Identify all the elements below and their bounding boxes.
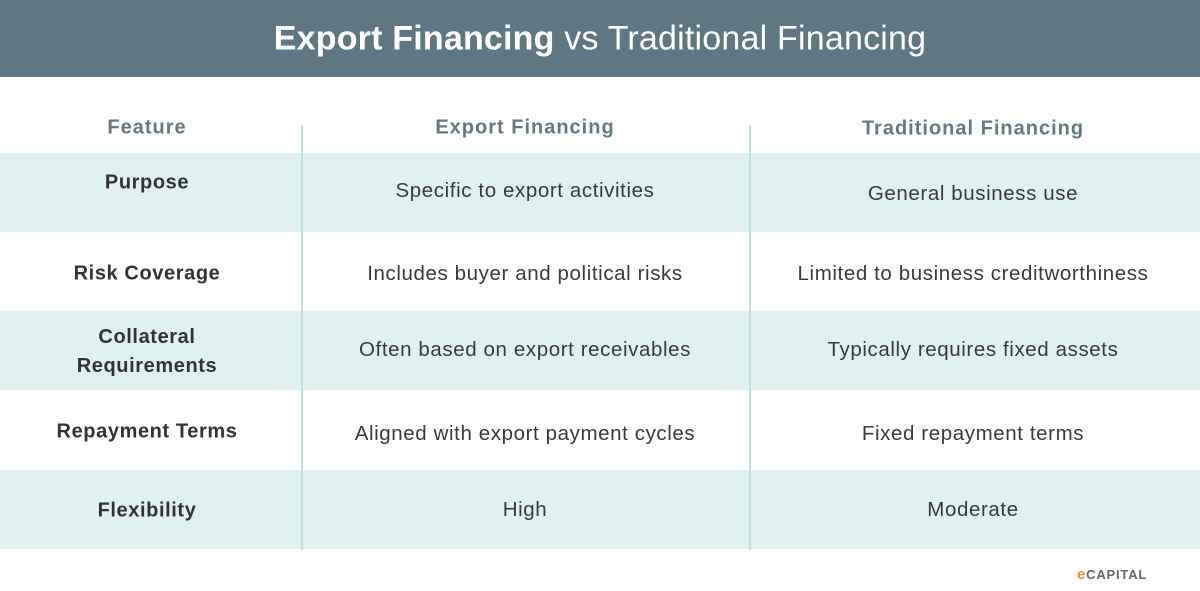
row: collateral: Collateral (98, 326, 196, 348)
row: purpose: General business use (868, 182, 1078, 205)
row backgrounds (0, 153, 1200, 232)
row: risk coverage: Limited to business creditworthiness (798, 262, 1148, 285)
row: collateral: Requirements (77, 355, 217, 377)
row: flexibility (98, 498, 1019, 522)
header bar (0, 0, 1200, 77)
row: purpose: Purpose (105, 172, 189, 194)
row: risk coverage: Risk Coverage (74, 262, 220, 284)
column headers: Export Financing (435, 116, 615, 138)
row: repayment (57, 420, 1084, 445)
row: collateral (77, 326, 1118, 377)
row: purpose (105, 172, 1078, 205)
column headers (107, 116, 1084, 140)
title: Export Financing vs Traditional Financing (274, 20, 926, 58)
row: flexibility: High (503, 498, 547, 521)
row: repayment: Fixed repayment terms (862, 422, 1084, 445)
row: flexibility: Moderate (927, 498, 1019, 521)
row: purpose: Specific to export activities (396, 179, 654, 202)
logo: eCAPITAL (1077, 566, 1147, 583)
row: repayment: Repayment Terms (57, 420, 237, 442)
row: risk coverage: Includes buyer and political risks (367, 262, 683, 285)
row: collateral: Often based on export receivables (359, 338, 691, 361)
row: collateral: Typically requires fixed assets (828, 338, 1118, 361)
row: risk coverage (74, 262, 1148, 285)
column headers: Traditional Financing (862, 118, 1084, 140)
row: repayment: Aligned with export payment cycles (355, 422, 695, 445)
column headers: Feature (107, 116, 187, 138)
row: flexibility: Flexibility (98, 500, 196, 522)
